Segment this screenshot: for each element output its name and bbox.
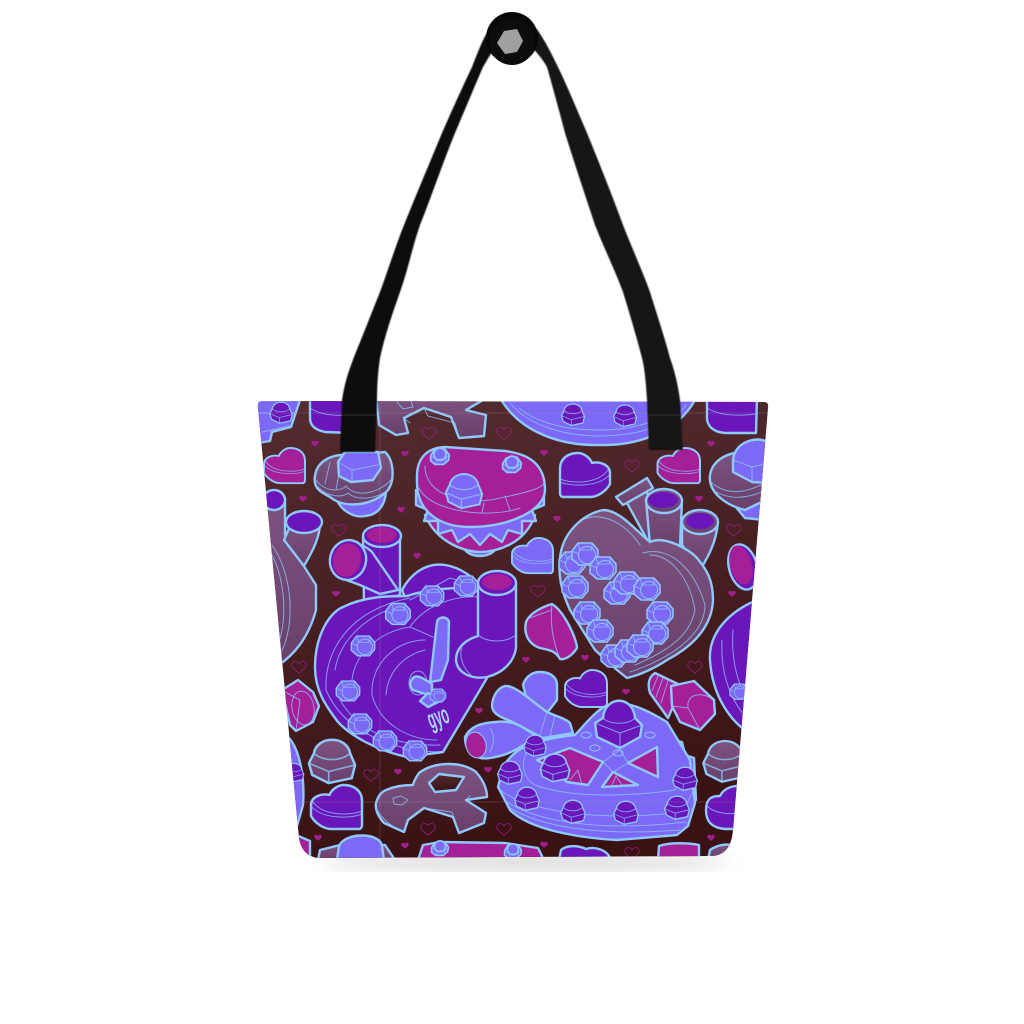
panel: top periwinkle pump fragment (500, 398, 696, 445)
pump rim lines (326, 578, 483, 752)
logo: gyo (423, 699, 453, 735)
faint seams (258, 402, 768, 858)
panel: stacked mauve heart with nut (315, 452, 393, 516)
panel: bottom wrench (376, 764, 487, 833)
panel: purple heart centre top (560, 453, 610, 497)
bottom left magenta corner (296, 835, 310, 860)
panel: top right purple heart (707, 398, 757, 433)
panel: periwinkle heart centre (512, 538, 553, 573)
elbow pipe (456, 571, 516, 678)
body nuts (498, 735, 697, 824)
pump rear lobe (401, 563, 478, 595)
bottom purple heart (559, 846, 611, 860)
bottom left mauve with nut (318, 836, 395, 860)
crank handle (409, 618, 449, 707)
top dome nut (595, 701, 642, 748)
inlet pipes (463, 672, 573, 760)
pipes on the large pump (325, 525, 401, 605)
panel: small purple heart (565, 670, 607, 707)
panel: purple heart bottom right (706, 786, 745, 829)
ring of nuts (559, 543, 673, 667)
panel: tilted magenta heart (525, 604, 577, 659)
bag body with repeating pattern (250, 395, 775, 865)
panel: left mauve pump fragment (262, 490, 322, 662)
bag fabric background (250, 395, 775, 865)
panel: mauve nut right (703, 741, 747, 782)
hook (486, 12, 538, 65)
panel: mauve heart pump with ring of nuts (559, 478, 718, 678)
body (498, 703, 695, 840)
bottom mauve fragment (708, 845, 740, 860)
ground shadow under bag (320, 854, 730, 870)
panel: top left periwinkle fragment (256, 400, 300, 443)
window bars and holes (603, 750, 628, 772)
panel: mauve dome nut left (309, 740, 355, 783)
gear underside (465, 550, 495, 556)
strap: left (340, 28, 496, 452)
panel: magenta heart right of handle (658, 448, 700, 483)
panel: magenta ellipse right edge (727, 543, 756, 591)
panel: top purple heart fragment (308, 401, 343, 434)
windows (537, 747, 658, 787)
black straps (340, 28, 683, 452)
small filled hearts (299, 441, 736, 849)
panel: right purple pump fragment (708, 601, 752, 729)
panel: magenta bolt (649, 673, 715, 730)
heart body (559, 510, 713, 678)
pump bolts (336, 576, 478, 761)
strap: right (530, 28, 683, 450)
bottom magenta fragment (658, 843, 699, 860)
gear teeth (416, 490, 544, 545)
gear teeth behind (679, 740, 698, 802)
rear pipes (616, 478, 718, 570)
heart top (417, 447, 545, 527)
panel: magenta heart left (264, 448, 305, 483)
pump body (315, 588, 487, 757)
small outlined hearts (292, 428, 741, 859)
panel: left periwinkle fragment (280, 738, 304, 826)
panel: periwinkle pump with windows (463, 672, 697, 840)
panel: top wrench (376, 401, 488, 440)
panel: magenta heart with gear (416, 447, 545, 556)
panel: large purple heart pump (315, 525, 516, 761)
bottom magenta heart (418, 841, 544, 860)
panel: right stacked mauve heart with nut (710, 440, 770, 520)
panel: bottom row fragments (296, 835, 740, 860)
panel: left magenta nut (282, 680, 319, 731)
strap end stitching (342, 414, 681, 416)
tote bag product illustration (258, 12, 768, 872)
panel: purple heart bottom left (311, 785, 362, 829)
